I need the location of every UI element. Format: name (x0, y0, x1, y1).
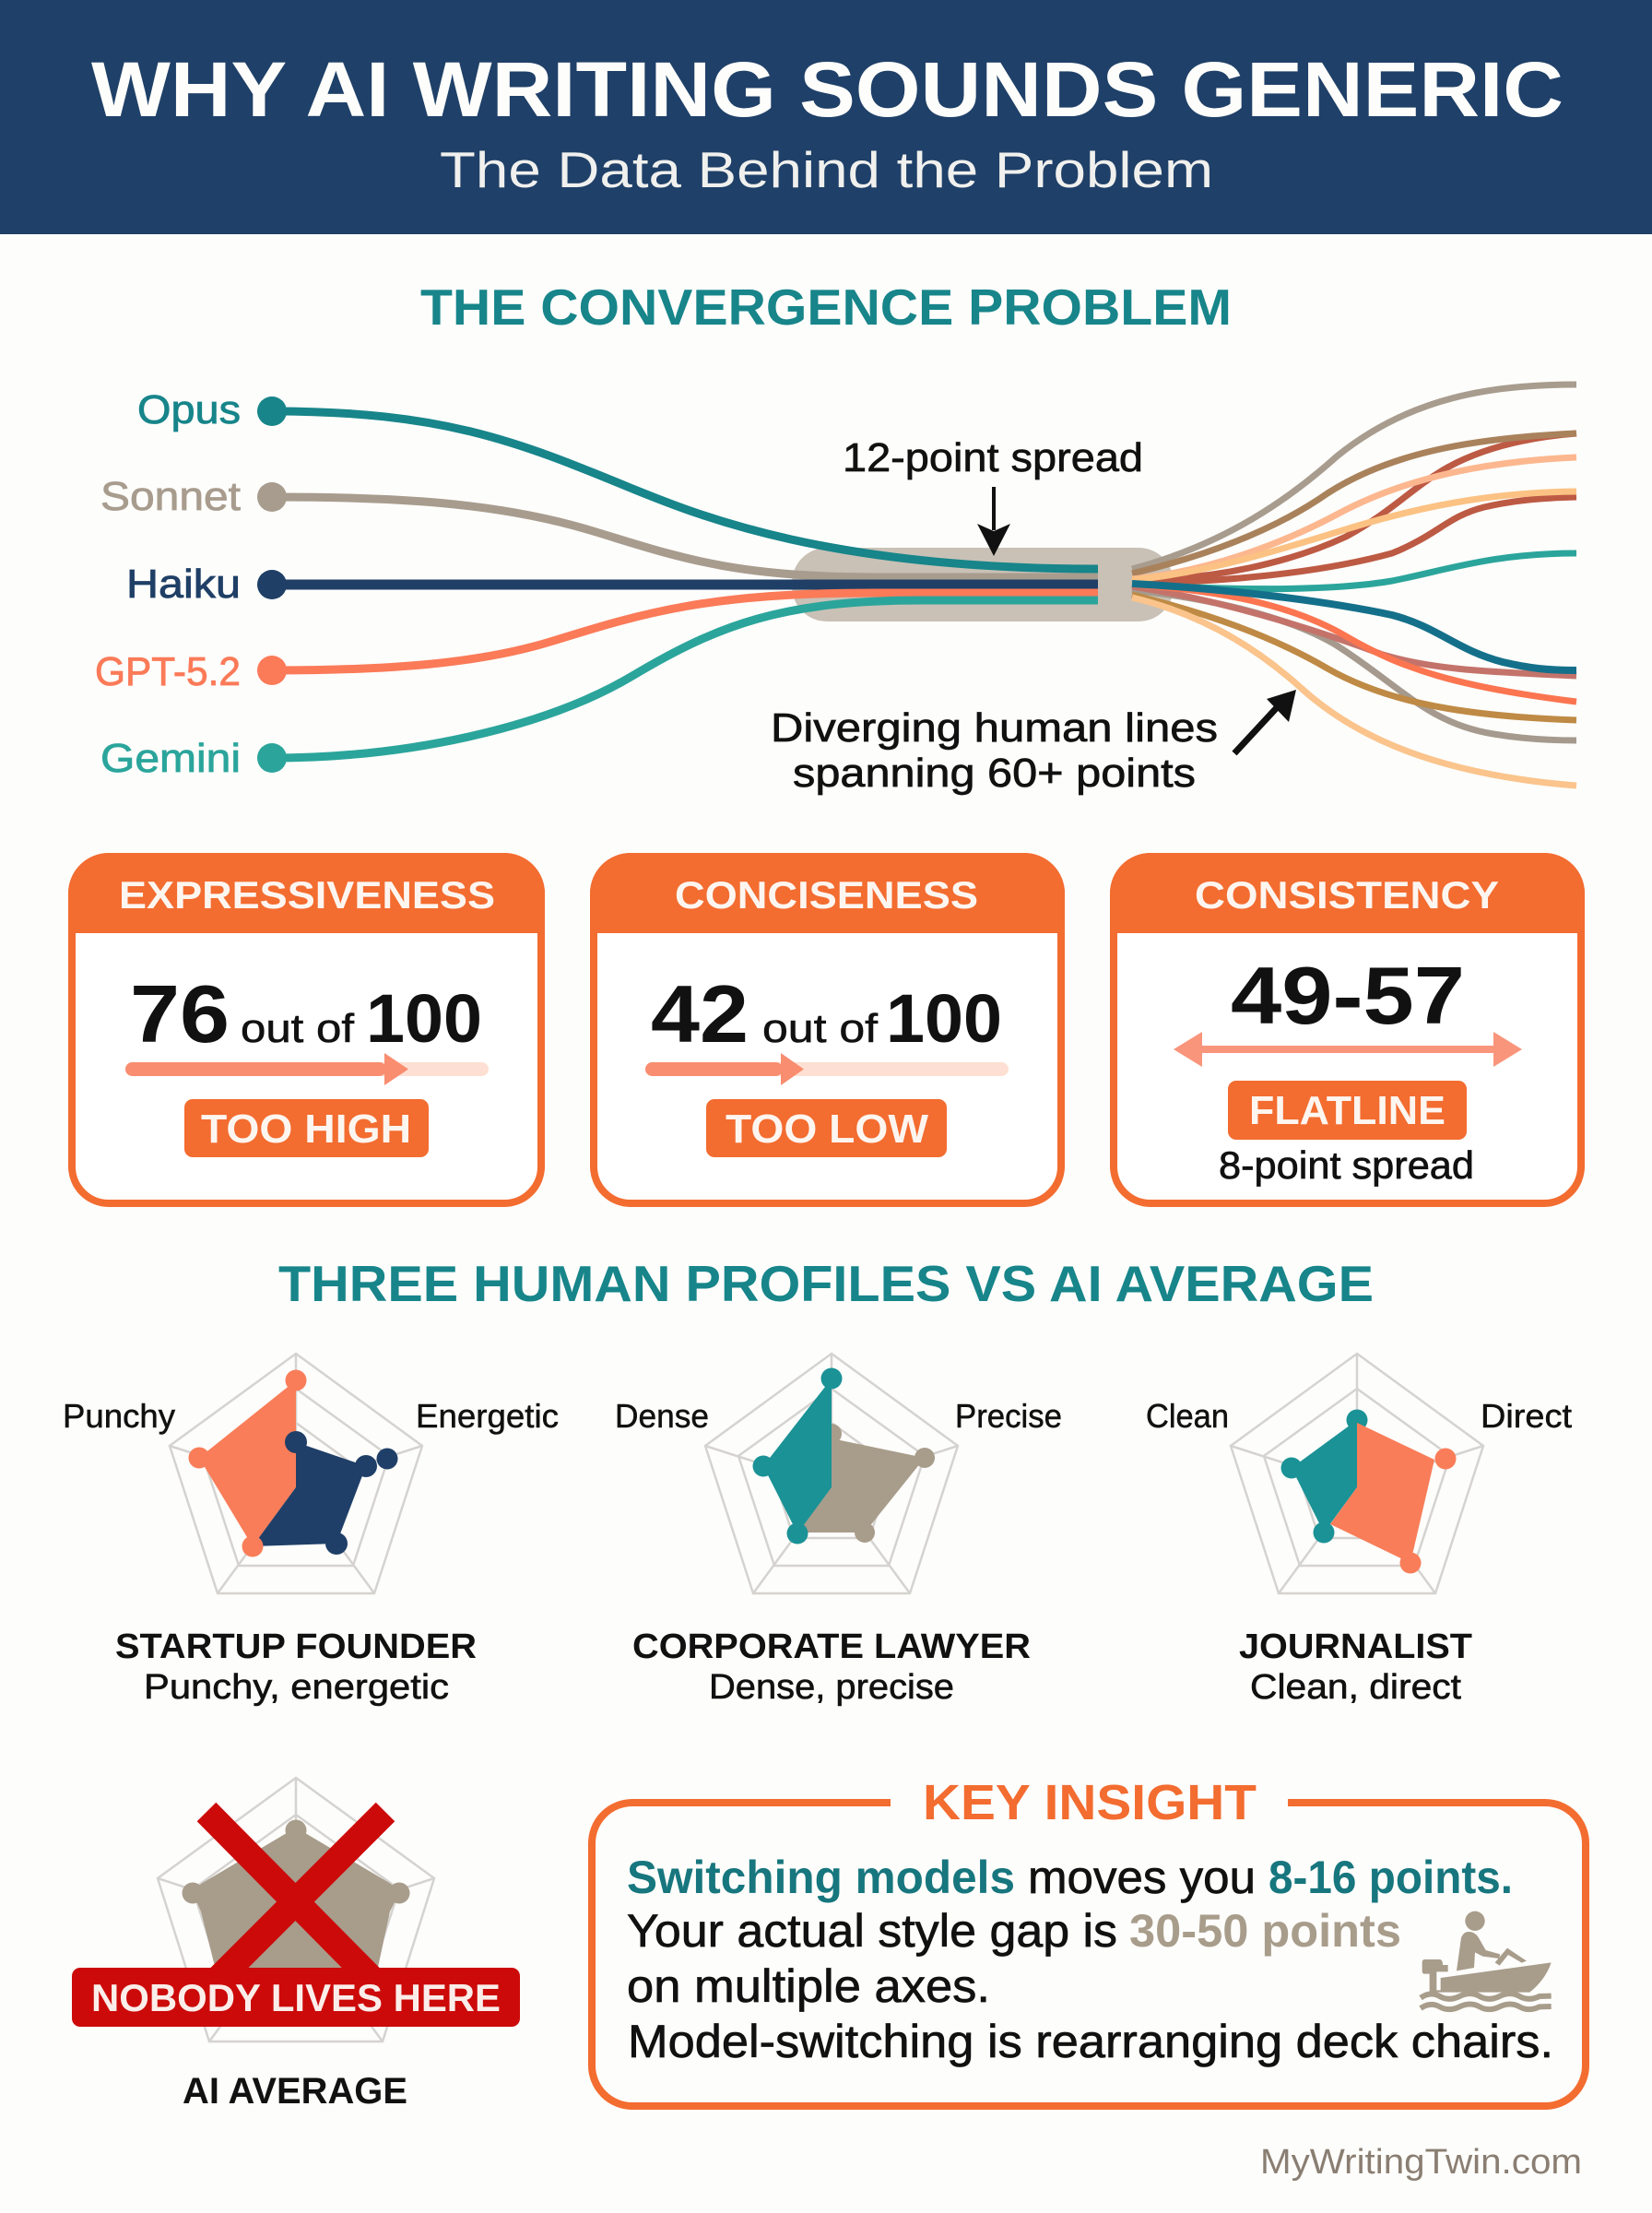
model labels (95, 387, 241, 781)
banner: nobody lives here: NOBODY LIVES HERE (91, 1976, 501, 2019)
heading: the convergence problem: THE CONVERGENCE PROBLEM (420, 278, 1232, 336)
annotation: 12-point spread: 12-point spread (843, 435, 1143, 480)
radar grid (705, 1354, 958, 1593)
AI model lines (272, 411, 1098, 758)
insight line 1 (627, 1852, 1513, 1903)
model dots (257, 396, 287, 773)
insight line 3: on multiple axes. (627, 1960, 990, 2012)
profile description: Punchy, energetic (144, 1668, 449, 1707)
badge: too low (706, 1099, 947, 1157)
score bar (125, 1053, 489, 1085)
axis labels (63, 1397, 559, 1435)
card heading: EXPRESSIVENESS (119, 873, 495, 917)
axis labels: Clean (1146, 1397, 1229, 1435)
header banner (0, 0, 1652, 234)
model labels: Haiku (126, 562, 241, 607)
profile shape: teal (1281, 1409, 1368, 1544)
score range: 49-57 (1231, 950, 1465, 1041)
radar grid (170, 1354, 422, 1593)
badge: flatline: FLATLINE (1249, 1088, 1446, 1133)
banner: nobody lives here (72, 1968, 520, 2027)
panel: consistency (1110, 853, 1585, 1203)
insight line 2 (627, 1905, 1401, 1957)
radar grid (1231, 1354, 1483, 1593)
footer: site name: MyWritingTwin.com (1260, 2143, 1582, 2182)
profile description: Clean, direct (1250, 1668, 1461, 1707)
profile shape: taupe (797, 1424, 935, 1543)
radar name: AI AVERAGE (183, 2071, 407, 2112)
convergence pill (792, 548, 1174, 621)
profile name: JOURNALIST (1239, 1627, 1472, 1666)
annotation: 12-point spread (843, 435, 1143, 556)
panel: key insight (592, 1775, 1586, 2106)
score: 100 (366, 980, 482, 1057)
model labels: GPT-5.2 (95, 649, 241, 694)
axis labels (615, 1397, 1062, 1435)
score: out of (241, 1006, 355, 1051)
score: 100 (886, 980, 1002, 1057)
heading: three human profiles: THREE HUMAN PROFILES VS AI AVERAGE (278, 1255, 1374, 1312)
profile description: Dense, precise (709, 1668, 954, 1707)
spread note: 8-point spread (1219, 1143, 1474, 1187)
badge: too high (184, 1099, 429, 1157)
annotation: diverging human lines: Diverging human lines (771, 705, 1218, 751)
key insight heading: KEY INSIGHT (923, 1775, 1257, 1830)
card heading: CONCISENESS (675, 873, 978, 917)
axis labels: Direct (1481, 1397, 1572, 1435)
profile shape: orange (1330, 1423, 1457, 1573)
human lines (1132, 385, 1576, 786)
radar grid (158, 1778, 434, 2041)
panel: expressiveness (68, 853, 545, 1203)
model labels: Sonnet (100, 474, 241, 519)
profile shape: teal (752, 1368, 843, 1544)
subtitle: The Data Behind the Problem (440, 141, 1213, 198)
radar: corporate lawyer (615, 1354, 1062, 1707)
score: out of (762, 1006, 879, 1051)
insight line 1: 8-16 points. (1268, 1852, 1513, 1903)
insight line 4: Model-switching is rearranging deck chairs. (628, 2016, 1553, 2067)
insight line 2: 30-50 points (1129, 1905, 1401, 1957)
score bar (645, 1053, 1009, 1085)
axis labels: Punchy (63, 1397, 175, 1435)
radar: AI average (72, 1778, 520, 2112)
red X (206, 1812, 385, 1981)
axis labels: Precise (955, 1397, 1062, 1435)
annotation: diverging human lines: spanning 60+ points (793, 751, 1196, 796)
axis labels (1146, 1397, 1572, 1435)
axis labels: Energetic (416, 1397, 559, 1435)
profile name: CORPORATE LAWYER (632, 1627, 1031, 1666)
model labels: Gemini (100, 736, 241, 781)
profile shape: orange (188, 1370, 306, 1546)
badge: too low: TOO LOW (726, 1106, 928, 1152)
badge: flatline (1228, 1081, 1467, 1140)
score: 76 (130, 968, 230, 1059)
chart: convergence lines (95, 385, 1576, 796)
profile name: STARTUP FOUNDER (115, 1627, 477, 1666)
axis labels: Dense (615, 1397, 709, 1435)
score: 42 (651, 968, 749, 1059)
score (651, 968, 1002, 1059)
annotation: diverging human lines (771, 690, 1296, 796)
card heading: CONSISTENCY (1195, 873, 1499, 917)
double arrow (1174, 1032, 1522, 1067)
radar: journalist (1146, 1354, 1572, 1707)
icon: person in boat (1421, 1911, 1552, 2009)
profile shape: navy (253, 1431, 398, 1555)
score (130, 968, 482, 1059)
insight line 1: Switching models (627, 1852, 1015, 1903)
panel: conciseness (590, 853, 1065, 1203)
model labels: Opus (137, 387, 241, 432)
insight line 1: moves you (1028, 1852, 1256, 1903)
title: WHY AI WRITING SOUNDS GENERIC (91, 46, 1564, 133)
badge: too high: TOO HIGH (201, 1106, 411, 1152)
average shape (183, 1820, 409, 2010)
insight line 2: Your actual style gap is (627, 1905, 1117, 1957)
radar: startup founder (63, 1354, 559, 1707)
